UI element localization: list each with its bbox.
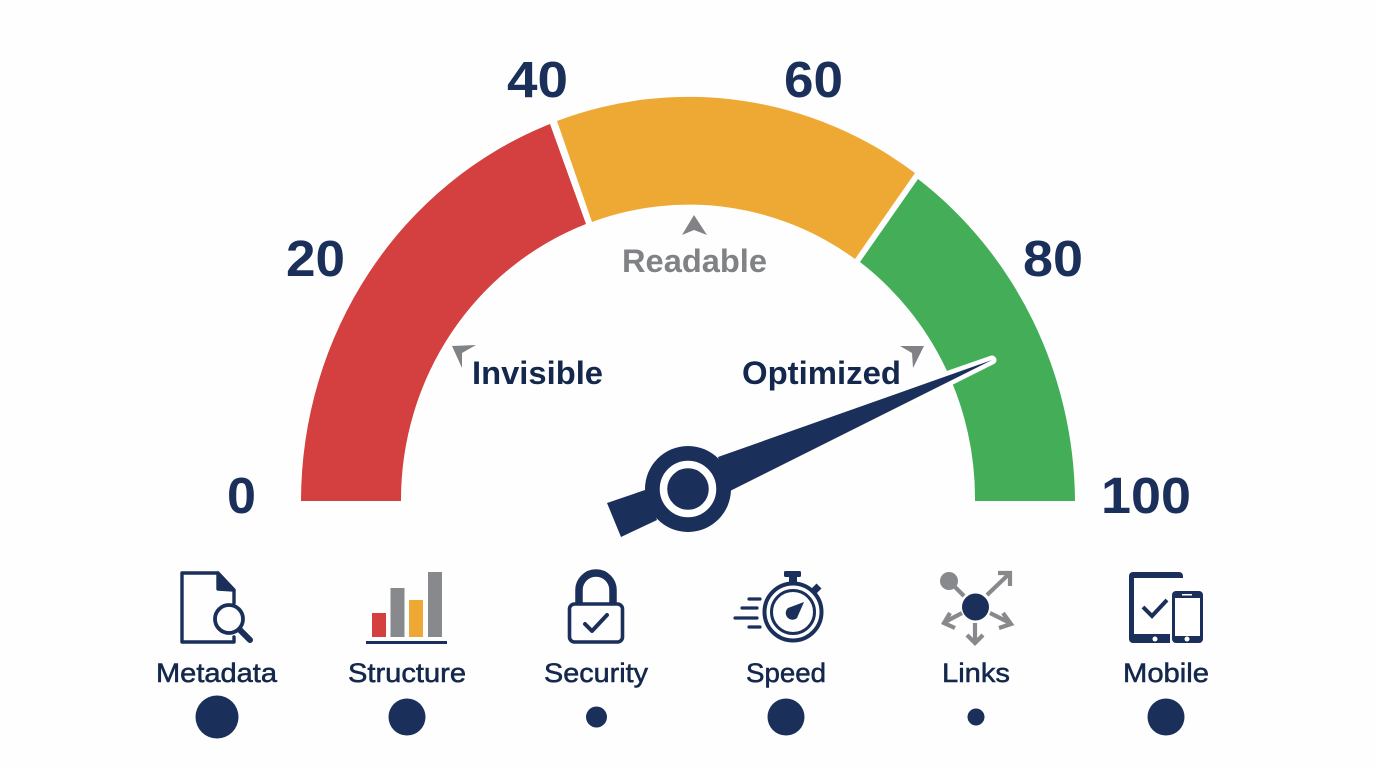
status dot (388, 698, 426, 736)
label: Mobile (1123, 658, 1209, 688)
zone label: Readable: Readable (622, 243, 767, 279)
scale numbers: 60 (784, 51, 843, 108)
factor: Links (940, 572, 1011, 726)
factor: Metadata (156, 573, 278, 738)
factor: Speed (735, 571, 826, 736)
icon: link network (940, 572, 1011, 643)
needle (607, 360, 992, 537)
zone label: Invisible (452, 345, 603, 391)
icon: document with magnifier (182, 573, 250, 642)
factor: Structure (348, 572, 466, 736)
segment: orange (557, 97, 915, 259)
zone label: Readable (622, 215, 767, 279)
icon: bar chart (366, 572, 447, 644)
icon: padlock (570, 573, 622, 642)
scale numbers: 100 (1101, 467, 1191, 524)
label: Security (544, 658, 649, 688)
factor: Security (544, 573, 649, 728)
factor: Mobile (1123, 572, 1209, 736)
status dot (586, 706, 607, 728)
gauge arc (301, 97, 1075, 501)
scale numbers: 20 (286, 230, 345, 287)
status dot (968, 708, 984, 726)
scale numbers (227, 51, 1191, 524)
segment: red (301, 124, 586, 501)
status dot (1148, 698, 1184, 736)
icon: stopwatch (735, 571, 822, 640)
zone label: Optimized: Optimized (742, 355, 901, 391)
zone label: Invisible: Invisible (472, 355, 603, 391)
segment: green (860, 179, 1075, 501)
icon: tablet and phone (1129, 572, 1204, 645)
status dot (196, 696, 238, 738)
label: Structure (348, 658, 466, 688)
zone label: Optimized (742, 346, 924, 391)
label: Links (942, 658, 1010, 688)
status dot (768, 698, 804, 736)
scale numbers: 40 (507, 51, 568, 108)
scale numbers: 80 (1023, 230, 1083, 287)
label: Speed (746, 658, 826, 688)
scale numbers: 0 (227, 467, 256, 524)
label: Metadata (156, 658, 278, 688)
